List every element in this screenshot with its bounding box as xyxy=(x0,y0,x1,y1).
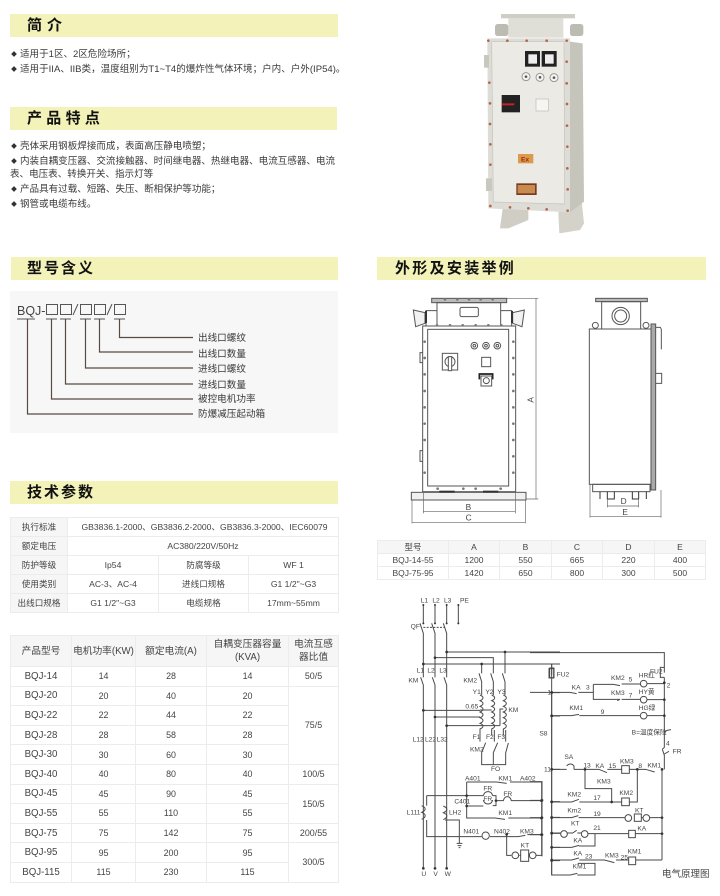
schematic: control circuit: KM2 xyxy=(619,790,633,797)
schematic: main circuit: W xyxy=(445,871,452,878)
schematic: control circuit: 13 xyxy=(583,762,591,769)
table: product models: BQJ-14 xyxy=(25,671,57,682)
panel: model meaning diagram: BQJ- xyxy=(17,304,45,318)
table: product models: BQJ-40 xyxy=(25,769,57,780)
schematic: main circuit: N402 xyxy=(494,828,510,835)
product photo: explosion-proof cabinet: Ex xyxy=(521,156,529,163)
schematic: main circuit: L2 xyxy=(432,597,440,604)
schematic: control circuit: KA xyxy=(573,837,583,844)
schematic: main circuit: L1 xyxy=(421,597,428,604)
diagram: outline drawings: D xyxy=(621,496,627,506)
table: product models: 产品型号 xyxy=(22,646,60,656)
schematic: control circuit: KM3 xyxy=(597,778,611,785)
table: product models: 95 xyxy=(99,848,108,858)
table: product models: 28 xyxy=(99,730,108,740)
schematic: control circuit: 17 xyxy=(593,795,601,802)
schematic: main circuit: FO xyxy=(491,766,500,773)
table: technical parameters: 进线口规格 xyxy=(182,579,225,589)
schematic: control circuit xyxy=(530,653,682,875)
heading: outline and installation xyxy=(377,257,706,280)
table: product models: 额定电流(A) xyxy=(145,646,197,656)
table: technical parameters: 17mm~55mm xyxy=(267,598,320,608)
table: product models: 60 xyxy=(166,750,176,760)
table: product models: 电流互感 xyxy=(294,639,333,650)
table: product models: 28 xyxy=(166,671,176,681)
table: product models: 器比值 xyxy=(299,652,328,663)
schematic: control circuit: KT xyxy=(571,821,580,828)
diagram: outline drawings: E xyxy=(622,507,628,517)
schematic: control circuit: KM1 xyxy=(569,705,583,712)
schematic: main circuit: U xyxy=(421,871,426,878)
table: product models: 200 xyxy=(164,848,178,858)
diagram: outline drawings: C xyxy=(466,512,472,522)
side view xyxy=(589,298,662,499)
text block: feature bullets: 钢管或电缆布线。 xyxy=(20,199,96,210)
schematic: control circuit: HY黄 xyxy=(639,687,655,696)
schematic: main circuit: KT xyxy=(521,843,529,850)
heading: intro xyxy=(10,14,338,37)
diagram: outline drawings: B xyxy=(466,502,472,512)
table: technical parameters: 执行标准 xyxy=(22,522,56,532)
table: dimensions: 300 xyxy=(621,568,636,578)
heading: technical parameters: 技术参数 xyxy=(27,484,95,501)
schematic: control circuit: 5 xyxy=(629,676,633,683)
schematic: main circuit: C401 xyxy=(454,798,471,805)
table: product models: BQJ-95 xyxy=(25,847,57,858)
table: technical parameters: AC380/220V/50Hz xyxy=(167,541,239,551)
schematic: control circuit: KA xyxy=(573,851,583,858)
text block: feature bullets xyxy=(10,140,335,210)
text block: feature bullets: 内装自耦变压器、交流接触器、时间继电器、热继电器、电流互感器、电流 xyxy=(20,156,335,167)
schematic: main circuit: F1 xyxy=(473,734,481,741)
schematic: main circuit: V xyxy=(433,871,438,878)
schematic: control circuit: 25 xyxy=(621,855,628,862)
schematic: main circuit: KM2 xyxy=(470,746,484,753)
schematic: control circuit: KM1 xyxy=(628,848,642,855)
schematic: main circuit: KM xyxy=(508,707,518,714)
schematic: control circuit: Km2 xyxy=(567,807,581,814)
table: product models: 20 xyxy=(99,691,108,701)
table: product models: BQJ-75 xyxy=(25,828,57,839)
schematic: control circuit: 1 xyxy=(547,689,551,696)
table: technical parameters: 额定电压 xyxy=(22,541,56,551)
table: product models: 75 xyxy=(99,828,108,838)
text block: feature bullets: 表、电压表、转换开关、指示灯等 xyxy=(10,169,153,180)
schematic: main circuit: QF xyxy=(411,624,420,631)
table: dimensions: 650 xyxy=(518,568,533,578)
heading: product features xyxy=(10,107,337,130)
schematic: control circuit: KM3 xyxy=(605,852,619,859)
schematic: control circuit: S8 xyxy=(539,731,548,738)
schematic: main circuit: Y1 xyxy=(473,689,481,696)
text block: feature bullets: 产品具有过载、短路、失压、断相保护等功能； xyxy=(20,184,220,195)
table: dimensions: 1420 xyxy=(465,568,483,578)
table: dimensions: C xyxy=(574,542,580,552)
schematic: control circuit: KA xyxy=(637,826,647,833)
schematic: main circuit: 0.65 xyxy=(465,704,479,711)
table: product models: BQJ-45 xyxy=(25,788,57,799)
table: dimensions: D xyxy=(625,542,632,552)
schematic: main circuit: KM2 xyxy=(463,678,477,685)
table: product models: 电机功率(KW) xyxy=(73,646,134,656)
schematic: main circuit: 11 xyxy=(544,766,551,773)
schematic: control circuit: KT xyxy=(635,807,644,814)
table: dimensions: BQJ-75-95 xyxy=(392,568,434,578)
table: product models: 150/5 xyxy=(302,799,325,809)
table: technical parameters: Ip54 xyxy=(105,560,121,570)
table: dimensions: B xyxy=(523,542,528,552)
table: technical parameters: AC-3、AC-4 xyxy=(89,579,137,589)
table: product models: 300/5 xyxy=(302,857,325,867)
schematic: control circuit: HR红 xyxy=(639,671,655,680)
schematic: main circuit: KM1 xyxy=(498,810,512,817)
table: technical parameters: 防护等级 xyxy=(22,560,56,570)
panel: model meaning diagram: 防爆减压起动箱 xyxy=(198,408,266,420)
schematic: control circuit: SA xyxy=(564,754,574,761)
table: product models: 45 xyxy=(243,789,252,799)
panel: model meaning diagram: 出线口数量 xyxy=(198,348,246,360)
schematic: control circuit: FU2 xyxy=(650,668,663,675)
table: product models: 142 xyxy=(164,828,178,838)
schematic: control circuit: KM2 xyxy=(611,675,625,682)
schematic: main circuit: F3 xyxy=(497,734,505,741)
heading: model meaning xyxy=(11,257,338,280)
table: product models: 115 xyxy=(96,867,111,877)
table: product models: 22 xyxy=(243,710,252,720)
schematic: main circuit: L3 xyxy=(444,597,452,604)
caption: schematic title: 电气原理图 xyxy=(662,869,710,880)
schematic: main circuit: KM xyxy=(408,678,418,685)
schematic: control circuit: KM3 xyxy=(620,758,634,765)
schematic: main circuit: L32 xyxy=(437,737,448,744)
schematic: main circuit: Y3 xyxy=(497,689,506,696)
schematic: control circuit: KM3 xyxy=(611,690,625,697)
schematic: main circuit: LH2 xyxy=(449,810,462,817)
front view xyxy=(411,298,526,500)
panel: model meaning diagram: 进线口数量 xyxy=(198,379,246,391)
table: technical parameters xyxy=(10,517,339,613)
table: technical parameters: 出线口规格 xyxy=(18,598,60,608)
table: dimensions xyxy=(377,540,706,580)
table: product models: 14 xyxy=(99,671,108,681)
panel: model meaning diagram xyxy=(10,291,338,433)
table: product models: 100/5 xyxy=(302,769,325,779)
table: product models: 14 xyxy=(243,671,252,681)
table: product models: 110 xyxy=(164,808,178,818)
table: product models: 40 xyxy=(243,769,252,779)
table: technical parameters: 电缆规格 xyxy=(186,598,221,608)
table: product models xyxy=(10,635,339,883)
schematic: main circuit: KM1 xyxy=(498,776,512,783)
table: technical parameters: 使用类别 xyxy=(22,579,56,589)
table: product models: 75/5 xyxy=(305,720,322,730)
schematic: control circuit: HG绿 xyxy=(639,703,656,712)
table: technical parameters: GB3836.1-2000、GB3836.2-2000、GB3836.3-2000、IEC60079 xyxy=(81,522,328,532)
table: product models: BQJ-30 xyxy=(25,749,57,760)
panel: model meaning diagram: 进线口螺纹 xyxy=(198,363,246,375)
schematic: main circuit: L2 xyxy=(427,668,435,675)
heading: outline and installation: 外形及安装举例 xyxy=(395,260,516,277)
heading: intro: 简介 xyxy=(27,17,67,34)
schematic: control circuit: KA xyxy=(595,763,605,770)
schematic: control circuit: B=温度保险 xyxy=(632,727,667,736)
schematic: main circuit: PE xyxy=(460,597,469,604)
table: product models: 200/55 xyxy=(300,828,327,838)
table: product models: (KVA) xyxy=(235,652,260,663)
schematic: main circuit: A402 xyxy=(520,776,536,783)
schematic: main circuit: L22 xyxy=(425,737,436,744)
table: product models: 28 xyxy=(243,730,252,740)
table: technical parameters: G1 1/2"~G3 xyxy=(271,579,316,589)
schematic: main circuit: A401 xyxy=(465,776,481,783)
table: dimensions: BQJ-14-55 xyxy=(392,555,434,565)
panel: model meaning diagram: 出线口螺纹 xyxy=(198,332,246,344)
table: product models: 40 xyxy=(166,691,176,701)
text block: intro bullets: 适用于IIA、IIB类，温度组别为T1~T4的爆炸性气体环境；户内、户外(IP54)。 xyxy=(20,64,345,75)
schematic: control circuit: 9 xyxy=(601,709,605,716)
dimension lines xyxy=(412,298,661,523)
table: dimensions: 400 xyxy=(673,555,687,565)
schematic: main circuit: KM3 xyxy=(520,828,534,835)
panel: model meaning diagram: 被控电机功率 xyxy=(198,393,256,405)
table: product models: 55 xyxy=(99,808,108,818)
table: product models: 30 xyxy=(243,750,252,760)
table: product models: 30 xyxy=(99,750,108,760)
schematic: main circuit xyxy=(407,597,560,878)
table: product models: BQJ-115 xyxy=(22,867,60,878)
table: product models: 95 xyxy=(243,848,252,858)
table: product models: 230 xyxy=(164,867,178,877)
table: dimensions: 550 xyxy=(518,555,533,565)
schematic: control circuit: KM1 xyxy=(573,863,587,870)
text block: intro bullets: 适用于1区、2区危险场所； xyxy=(20,49,136,60)
schematic: main circuit: L111 xyxy=(407,810,421,817)
table: product models: 55 xyxy=(243,808,252,818)
schematic: control circuit: KA xyxy=(572,685,581,692)
table: product models: 75 xyxy=(243,828,252,838)
table: product models: 20 xyxy=(243,691,252,701)
heading: product features: 产品特点 xyxy=(27,110,104,127)
table: product models: 50/5 xyxy=(305,671,322,681)
schematic: control circuit: 23 xyxy=(585,854,593,861)
schematic: control circuit: 2 xyxy=(667,682,671,689)
table: product models: 58 xyxy=(166,730,176,740)
schematic: control circuit: KM2 xyxy=(567,792,581,799)
table: dimensions: 1200 xyxy=(465,555,483,565)
table: product models: BQJ-55 xyxy=(25,808,57,819)
table: dimensions: 型号 xyxy=(404,542,422,552)
table: product models: 自耦变压器容量 xyxy=(214,639,281,650)
table: dimensions: 800 xyxy=(570,568,584,578)
table: product models: 45 xyxy=(99,789,108,799)
schematic: control circuit: 21 xyxy=(593,825,601,832)
table: product models: 80 xyxy=(166,769,176,779)
table: dimensions: 665 xyxy=(570,555,584,565)
table: product models: 115 xyxy=(240,867,255,877)
diagram: outline drawings: A xyxy=(525,397,535,403)
table: dimensions: 500 xyxy=(673,568,687,578)
schematic: control circuit: FR xyxy=(673,748,682,755)
schematic: main circuit: FR xyxy=(503,791,512,798)
table: dimensions: A xyxy=(471,542,477,552)
heading: technical parameters xyxy=(10,481,338,504)
table: dimensions: E xyxy=(677,542,683,552)
schematic: main circuit: F2 xyxy=(486,734,494,741)
schematic: main circuit: N401 xyxy=(463,828,480,835)
schematic: main circuit: L1 xyxy=(417,668,424,675)
heading: model meaning: 型号含义 xyxy=(27,260,95,277)
table: product models: 44 xyxy=(166,710,176,720)
schematic: control circuit: 15 xyxy=(609,763,616,770)
schematic: control circuit: 4 xyxy=(666,740,670,747)
table: technical parameters: WF 1 xyxy=(283,560,304,570)
schematic: control circuit: 7 xyxy=(629,692,633,699)
schematic: main circuit: L3 xyxy=(439,668,447,675)
text block: intro bullets xyxy=(11,48,345,75)
schematic: main circuit: FR xyxy=(483,786,492,793)
table: technical parameters: G1 1/2"~G3 xyxy=(90,598,136,608)
table: dimensions: 220 xyxy=(621,555,636,565)
schematic: control circuit: 19 xyxy=(593,811,601,818)
schematic: main circuit: Y2 xyxy=(485,689,494,696)
schematic: main circuit: L12 xyxy=(413,737,424,744)
schematic: main circuit: FR xyxy=(483,796,492,803)
table: product models: 90 xyxy=(166,789,176,799)
schematic: control circuit: 3 xyxy=(586,685,590,692)
schematic: control circuit: KM1 xyxy=(647,762,661,769)
table: product models: BQJ-20 xyxy=(25,690,57,701)
schematic: control circuit: 8 xyxy=(638,763,642,770)
schematic: control circuit: FU2 xyxy=(557,671,570,678)
text block: feature bullets: 壳体采用钢板焊接而成，表面高压静电喷塑； xyxy=(20,141,211,152)
table: product models: BQJ-22 xyxy=(25,710,57,721)
table: technical parameters: 防腐等级 xyxy=(186,560,221,570)
table: product models: 22 xyxy=(99,710,108,720)
table: product models: BQJ-28 xyxy=(25,730,57,741)
table: product models: 40 xyxy=(99,769,108,779)
